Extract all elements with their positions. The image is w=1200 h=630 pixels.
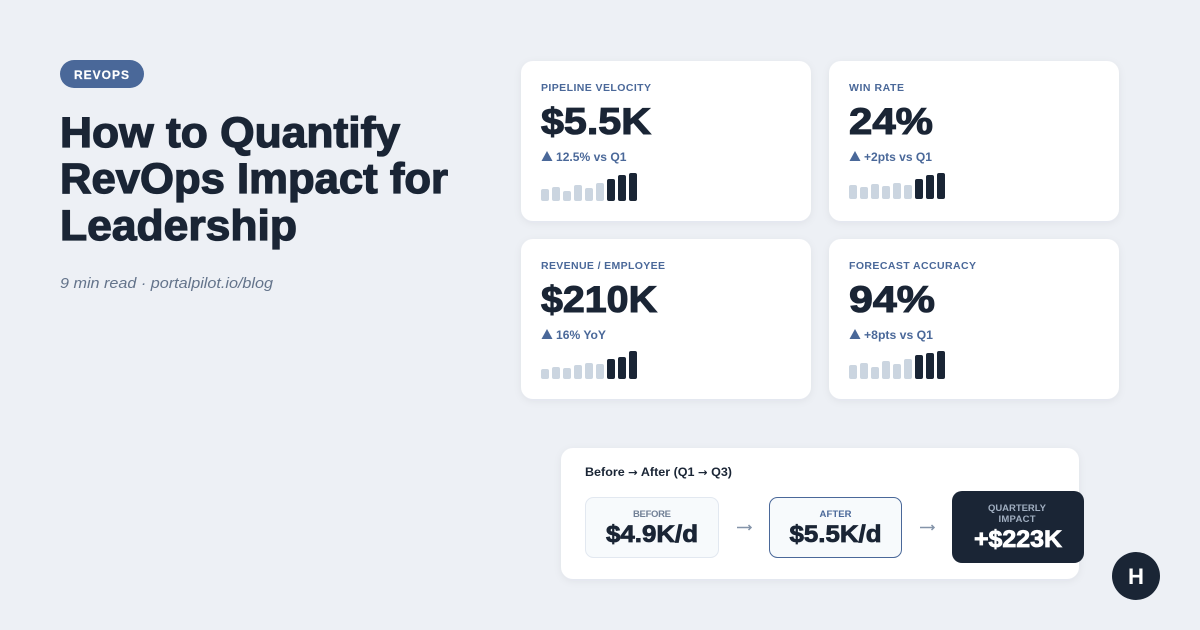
- panel: revenue per employee: [521, 239, 811, 399]
- trend: revenue per employee: 16% YoY: [556, 328, 606, 342]
- brand logo: [1112, 552, 1160, 600]
- panel: win rate: 24%: [849, 101, 933, 142]
- before box: $4.9K/d: [606, 521, 698, 548]
- panel: forecast accuracy: [829, 239, 1119, 399]
- panel: revenue per employee: REVENUE / EMPLOYEE: [541, 260, 665, 272]
- title: How to Quantify: [60, 109, 400, 157]
- trend: win rate: +2pts vs Q1: [864, 150, 932, 164]
- before box: BEFORE: [633, 509, 671, 520]
- title: RevOps Impact for: [60, 155, 448, 203]
- bar chart: forecast accuracy: [849, 351, 945, 379]
- after box: $5.5K/d: [790, 521, 882, 548]
- category badge: REVOPS: [74, 68, 129, 82]
- bar chart: pipeline velocity: [541, 173, 637, 201]
- quarterly impact box: [952, 491, 1084, 563]
- before box: [586, 498, 718, 558]
- panel: forecast accuracy: 94%: [849, 279, 935, 320]
- panel: win rate: WIN RATE: [849, 82, 904, 94]
- title: [60, 109, 448, 250]
- trend: pipeline velocity: 12.5% vs Q1: [556, 150, 627, 164]
- panel: revenue per employee: $210K: [541, 279, 657, 320]
- category badge: [60, 60, 144, 88]
- trend: forecast accuracy: +8pts vs Q1: [864, 328, 933, 342]
- bar chart: revenue per employee: [541, 351, 637, 379]
- after box: [770, 498, 902, 558]
- quarterly impact box: IMPACT: [998, 514, 1036, 525]
- title: Leadership: [60, 202, 297, 250]
- comparison heading: Before → After (Q1 → Q3): [585, 465, 732, 479]
- panel: forecast accuracy: FORECAST ACCURACY: [849, 260, 976, 272]
- after box: AFTER: [820, 509, 852, 520]
- arrow: after to impact: [920, 525, 934, 530]
- panel: pipeline velocity: PIPELINE VELOCITY: [541, 82, 651, 94]
- arrow: before to after: [737, 525, 751, 530]
- quarterly impact box: QUARTERLY: [988, 503, 1047, 514]
- quarterly impact box: +$223K: [974, 526, 1063, 553]
- panel: win rate: [829, 61, 1119, 221]
- panel: pipeline velocity: [521, 61, 811, 221]
- brand logo: H: [1128, 564, 1144, 589]
- panel: pipeline velocity: $5.5K: [541, 101, 651, 142]
- read time and source: 9 min read · portalpilot.io/blog: [60, 275, 274, 292]
- bar chart: win rate: [849, 173, 945, 199]
- panel: before and after comparison: [561, 448, 1084, 579]
